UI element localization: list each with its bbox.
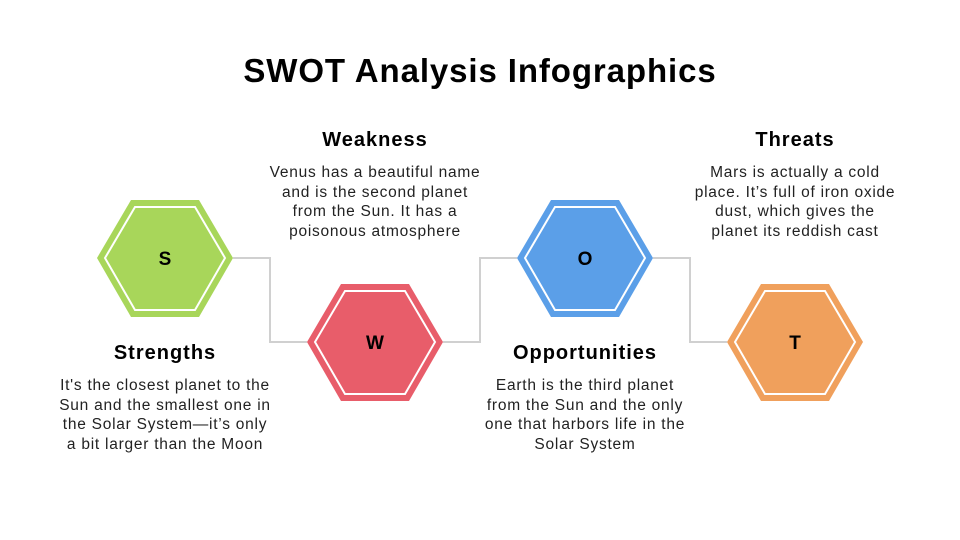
text: strengths: Strengths [114, 342, 216, 364]
text: threats: planet its reddish cast [711, 222, 879, 240]
hexagon W [307, 284, 443, 401]
text: strengths: a bit larger than the Moon [67, 436, 263, 452]
hexagon T: T [789, 333, 801, 354]
text: threats [695, 129, 895, 240]
text: opportunities: Opportunities [513, 342, 657, 364]
text: opportunities: from the Sun and the only [487, 396, 683, 414]
text: weakness: Venus has a beautiful name [270, 164, 480, 181]
text: strengths: Sun and the smallest one in [59, 396, 271, 414]
text: threats: Threats [755, 129, 835, 151]
hexagon O: O [578, 249, 592, 270]
text: threats: Mars is actually a cold [710, 164, 880, 181]
text: weakness [270, 129, 480, 240]
text: opportunities: Solar System [534, 436, 636, 452]
text: strengths [59, 342, 271, 452]
text: threats: dust, which gives the [715, 203, 875, 220]
hexagon W: W [366, 333, 384, 354]
hexagon O [517, 200, 653, 317]
hexagon S [97, 200, 233, 317]
title: SWOT Analysis Infographics [243, 52, 717, 89]
text: opportunities [485, 342, 685, 452]
text: weakness: from the Sun. It has a [293, 203, 457, 220]
text: weakness: Weakness [322, 129, 428, 151]
text: opportunities: Earth is the third planet [496, 377, 674, 394]
text: weakness: poisonous atmosphere [289, 222, 461, 240]
text: threats: place. It’s full of iron oxide [695, 184, 895, 200]
text: opportunities: one that harbors life in the [485, 416, 685, 433]
text: weakness: and is the second planet [282, 184, 468, 200]
text: strengths: It's the closest planet to the [60, 377, 270, 394]
connectors [233, 258, 727, 342]
text: strengths: the Solar System—it’s only [63, 416, 267, 433]
hexagon T [727, 284, 863, 401]
hexagon S: S [159, 249, 171, 270]
